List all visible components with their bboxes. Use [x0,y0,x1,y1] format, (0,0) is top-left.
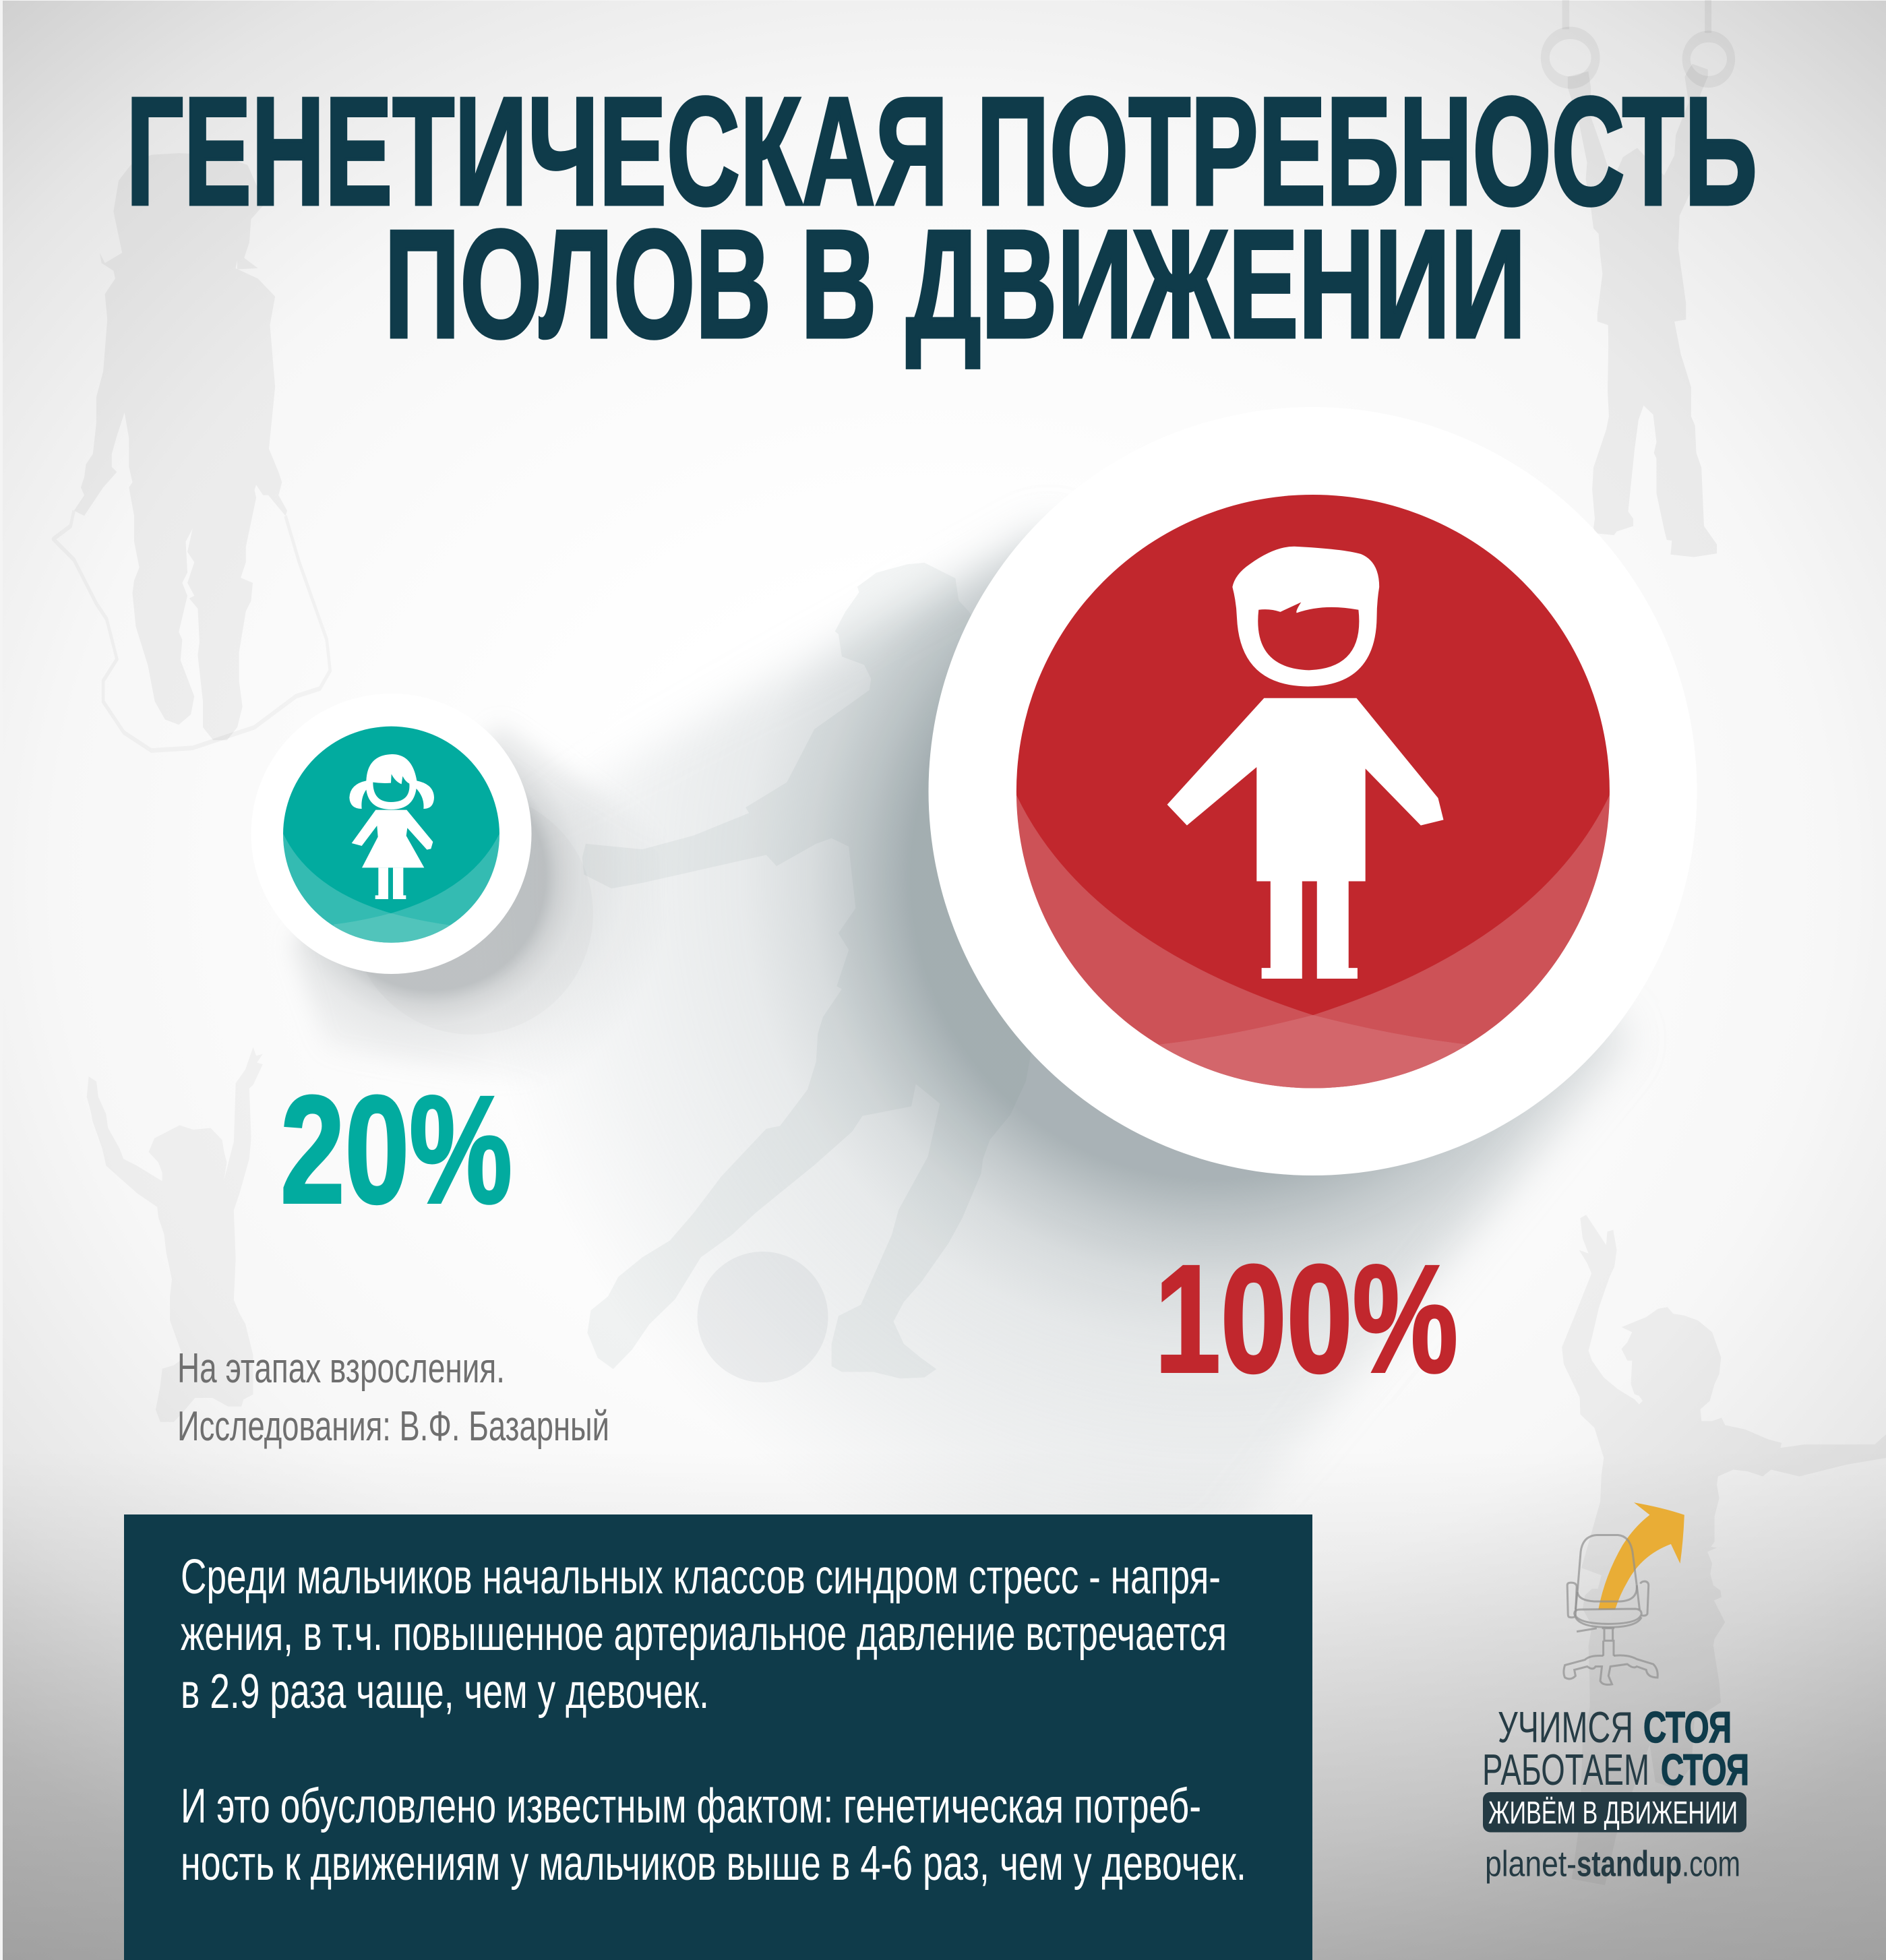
source note: На этапах взросления. [177,1345,505,1392]
panel: explanation text box [124,1514,1312,1960]
silhouette: girl with jump rope [53,153,330,751]
panel: girl circle [283,727,531,974]
body text: Среди мальчиков начальных классов синдром стресс - напря- [181,1550,1221,1604]
body text [181,1550,1246,1891]
silhouette: boy playing ball [582,563,1055,1382]
body text: жения, в т.ч. повышенное артериальное давление встречается [181,1607,1227,1661]
logo: wordmark: planet- [1485,1844,1577,1885]
big circle long shadow [564,516,1630,1514]
silhouette: jumping girl [87,1047,263,1422]
source note [177,1345,609,1450]
logo: wordmark: standup [1577,1844,1682,1885]
stat: 100%: 100% [1155,1234,1458,1405]
icon: girl figure [349,754,434,899]
stat: 20%: 20% [280,1065,512,1235]
logo: wordmark: .com [1682,1844,1740,1885]
silhouette: child on gym rings [1545,0,1731,557]
logo: wordmark: ЖИВЁМ В ДВИЖЕНИИ [1488,1794,1738,1831]
silhouette: boy with raised arm [1562,1215,1886,1885]
body text: в 2.9 раза чаще, чем у девочек. [181,1665,709,1719]
logo: wordmark: СТОЯ [1661,1745,1749,1794]
source note: Исследования: В.Ф. Базарный [177,1403,609,1450]
body text: ность к движениям у мальчиков выше в 4-6 раз, чем у девочек. [181,1837,1246,1891]
icon: boy figure [1167,547,1444,979]
small circle long shadow [293,727,623,1065]
logo: wordmark: УЧИМСЯ [1498,1703,1633,1752]
logo: wordmark: СТОЯ [1643,1703,1732,1752]
body text: И это обусловлено известным фактом: генетическая потреб- [181,1779,1201,1833]
title [126,66,1757,370]
logo: wordmark [1482,1703,1749,1885]
panel: boy circle [929,495,1631,1175]
logo: arrow and chair [1564,1502,1684,1685]
logo: wordmark: РАБОТАЕМ [1482,1745,1649,1794]
